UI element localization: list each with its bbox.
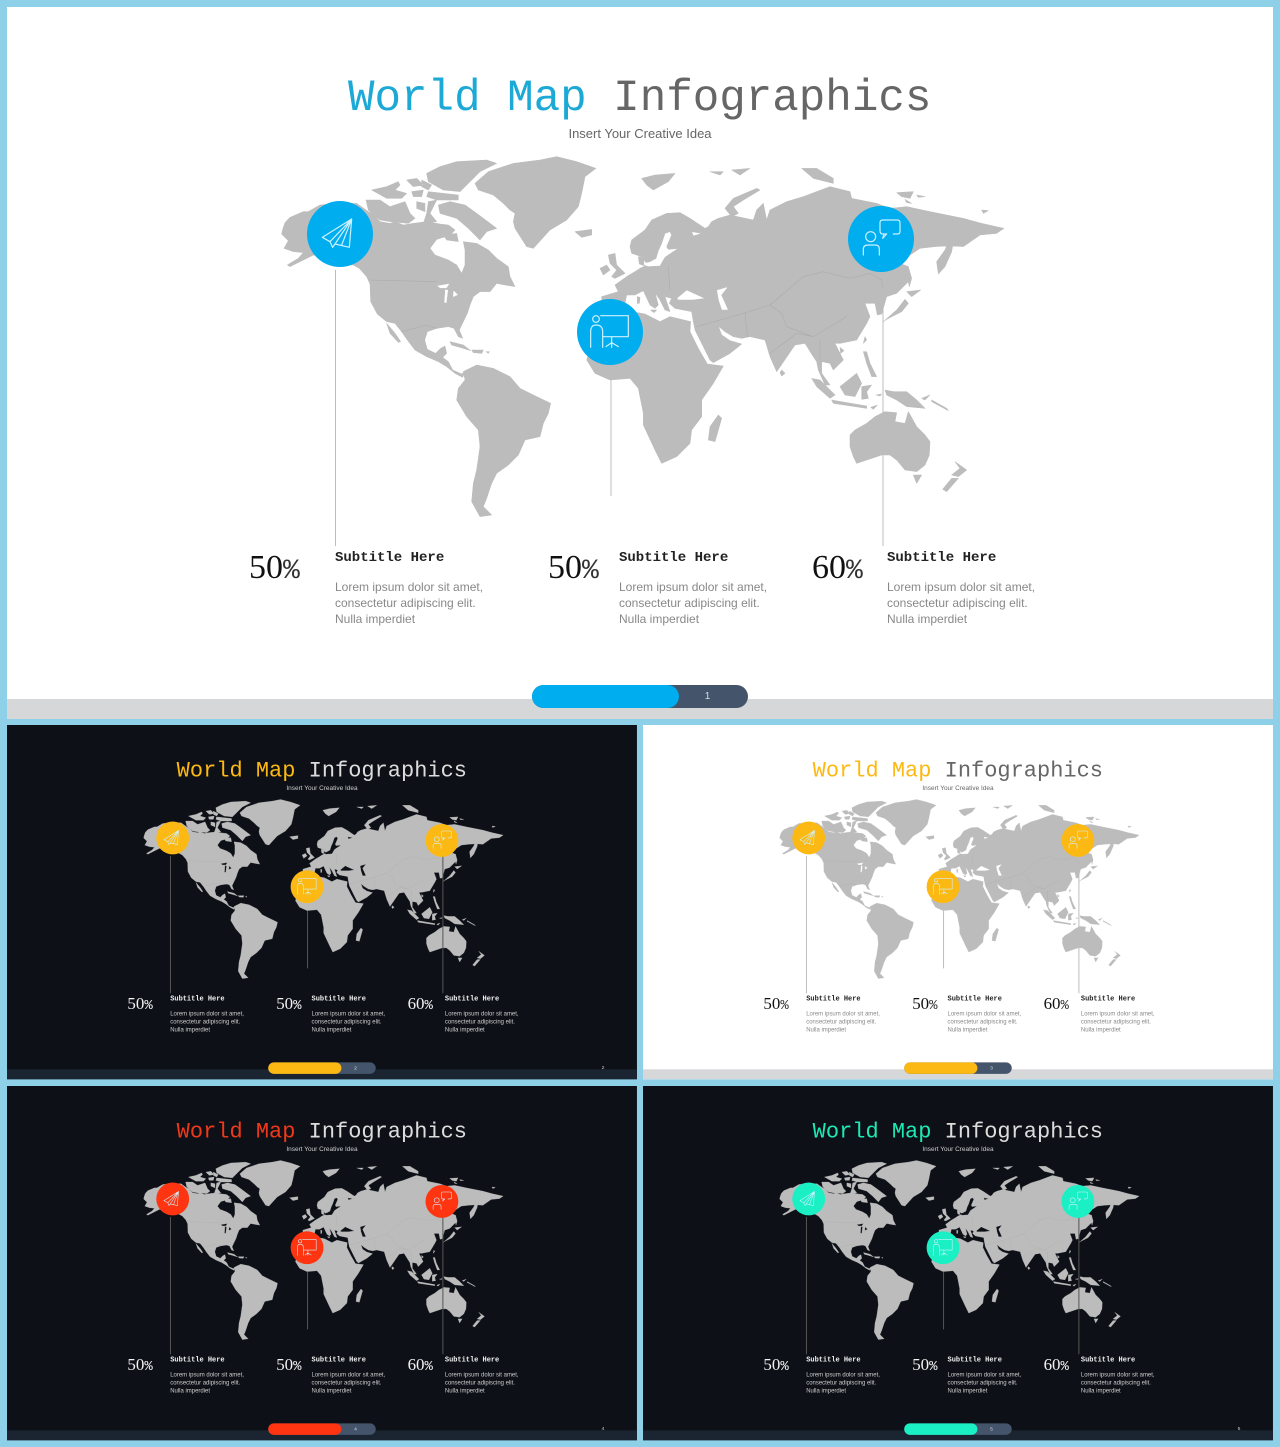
- panel: light yellow slide: [643, 725, 1273, 1079]
- stat 1: Subtitle Here: [806, 1356, 861, 1364]
- stat 1: [127, 1356, 244, 1394]
- stat 1: Lorem ipsum dolor sit amet,: [806, 1371, 880, 1378]
- stat 1: 50%: [763, 995, 789, 1014]
- subtitle: Insert Your Creative Idea: [286, 1145, 358, 1153]
- stat 3: consectetur adipiscing elit.: [1081, 1379, 1151, 1386]
- stat 1: consectetur adipiscing elit.: [335, 596, 476, 610]
- stat 3: [812, 549, 1035, 626]
- panel: dark teal slide: [643, 1086, 1273, 1440]
- stat 1: Lorem ipsum dolor sit amet,: [806, 1010, 880, 1017]
- footer bar: [643, 1430, 1273, 1440]
- stat 3: Lorem ipsum dolor sit amet,: [445, 1371, 519, 1378]
- subtitle: Insert Your Creative Idea: [922, 784, 994, 792]
- stat 3: [1044, 995, 1155, 1033]
- stat 1: 50%: [127, 1356, 153, 1375]
- title: World Map Infographics: [348, 74, 931, 124]
- stat 2: 50%: [912, 995, 937, 1014]
- stat 2: Subtitle Here: [948, 995, 1002, 1003]
- stat 1: consectetur adipiscing elit.: [170, 1018, 240, 1025]
- stat 3: Subtitle Here: [445, 995, 499, 1003]
- stat 1: 50%: [763, 1356, 789, 1375]
- stat 1: Subtitle Here: [170, 995, 225, 1003]
- progress pill: 2: [354, 1065, 357, 1071]
- world map with pins: [143, 799, 504, 994]
- stat 3: [1044, 1356, 1155, 1394]
- stat 2: Lorem ipsum dolor sit amet,: [312, 1371, 385, 1378]
- stat 3: Subtitle Here: [1081, 995, 1135, 1003]
- stat 1: 50%: [127, 995, 153, 1014]
- stat 1: 50%: [249, 549, 300, 587]
- title: World Map Infographics: [177, 1119, 467, 1144]
- stat 3: Nulla imperdiet: [445, 1387, 485, 1394]
- stat 3: Subtitle Here: [887, 550, 996, 566]
- stat 2: Nulla imperdiet: [312, 1026, 351, 1033]
- progress pill: 4: [354, 1426, 357, 1432]
- stat 1: Nulla imperdiet: [806, 1387, 846, 1394]
- stat 2: [548, 549, 767, 626]
- stat 3: consectetur adipiscing elit.: [445, 1379, 515, 1386]
- stat 2: Lorem ipsum dolor sit amet,: [619, 580, 767, 594]
- progress pill: [268, 1062, 376, 1074]
- stat 2: Nulla imperdiet: [948, 1387, 987, 1394]
- stat 1: Subtitle Here: [335, 550, 444, 566]
- stat 3: Nulla imperdiet: [887, 612, 967, 626]
- stat 3: consectetur adipiscing elit.: [1081, 1018, 1151, 1025]
- stat 1: Nulla imperdiet: [335, 612, 415, 626]
- stat 3: 60%: [1044, 1356, 1069, 1375]
- stat 2: consectetur adipiscing elit.: [948, 1379, 1018, 1386]
- stat 2: Subtitle Here: [948, 1356, 1002, 1364]
- stat 1: Lorem ipsum dolor sit amet,: [170, 1010, 244, 1017]
- stat 2: Lorem ipsum dolor sit amet,: [948, 1010, 1021, 1017]
- world map with pins: [780, 799, 1140, 994]
- title: World Map Infographics: [813, 1119, 1103, 1144]
- stat 3: Nulla imperdiet: [1081, 1026, 1121, 1033]
- stat 2: 50%: [548, 549, 599, 587]
- stat 1: Nulla imperdiet: [170, 1026, 210, 1033]
- subtitle: Insert Your Creative Idea: [922, 1145, 994, 1153]
- stat 3: Lorem ipsum dolor sit amet,: [1081, 1010, 1155, 1017]
- stat 2: 50%: [276, 995, 301, 1014]
- progress pill: 1: [705, 691, 710, 702]
- title: World Map Infographics: [177, 758, 467, 783]
- footer bar: [643, 1069, 1273, 1079]
- panel: dark yellow slide: [7, 725, 637, 1079]
- stat 2: consectetur adipiscing elit.: [312, 1379, 382, 1386]
- stat 2: Lorem ipsum dolor sit amet,: [948, 1371, 1021, 1378]
- stat 1: [763, 1356, 880, 1394]
- stat 1: Subtitle Here: [170, 1356, 225, 1364]
- stat 3: Lorem ipsum dolor sit amet,: [1081, 1371, 1155, 1378]
- stat 3: Lorem ipsum dolor sit amet,: [445, 1010, 519, 1017]
- page number: 5: [1238, 1426, 1240, 1431]
- progress pill: [268, 1423, 376, 1435]
- world map with pins: [282, 156, 1004, 546]
- panel: main blue slide: [7, 7, 1273, 719]
- stat 1: Subtitle Here: [806, 995, 861, 1003]
- stat 1: consectetur adipiscing elit.: [170, 1379, 240, 1386]
- stat 2: [276, 995, 385, 1033]
- page number: 4: [602, 1426, 604, 1431]
- progress pill: 3: [990, 1065, 993, 1071]
- stat 1: [127, 995, 244, 1033]
- stat 1: Lorem ipsum dolor sit amet,: [170, 1371, 244, 1378]
- stat 1: Lorem ipsum dolor sit amet,: [335, 580, 483, 594]
- stat 1: [249, 549, 483, 626]
- footer bar: [7, 699, 1273, 719]
- stat 3: 60%: [408, 995, 433, 1014]
- stat 1: consectetur adipiscing elit.: [806, 1379, 876, 1386]
- stat 3: 60%: [812, 549, 863, 587]
- world map with pins: [779, 1160, 1140, 1354]
- stat 2: [276, 1356, 385, 1394]
- stat 2: Lorem ipsum dolor sit amet,: [312, 1010, 385, 1017]
- stat 2: [912, 1356, 1021, 1394]
- stat 3: 60%: [408, 1356, 433, 1375]
- stat 2: 50%: [276, 1356, 301, 1375]
- stat 3: Subtitle Here: [445, 1356, 499, 1364]
- stat 2: Nulla imperdiet: [312, 1387, 351, 1394]
- stat 2: Subtitle Here: [312, 1356, 366, 1364]
- progress pill: 5: [990, 1426, 993, 1432]
- stat 3: Subtitle Here: [1081, 1356, 1135, 1364]
- world map with pins: [143, 1160, 504, 1354]
- stat 2: Subtitle Here: [619, 550, 728, 566]
- stat 3: 60%: [1044, 995, 1069, 1014]
- stat 2: consectetur adipiscing elit.: [619, 596, 760, 610]
- stat 3: Lorem ipsum dolor sit amet,: [887, 580, 1035, 594]
- stat 2: consectetur adipiscing elit.: [312, 1018, 382, 1025]
- page number: 2: [602, 1065, 604, 1070]
- footer bar: [7, 1430, 637, 1440]
- progress pill: [532, 685, 748, 708]
- stat 3: [408, 995, 519, 1033]
- stat 1: Nulla imperdiet: [170, 1387, 210, 1394]
- subtitle: Insert Your Creative Idea: [568, 126, 712, 141]
- title: World Map Infographics: [813, 758, 1103, 783]
- stat 3: [408, 1356, 519, 1394]
- stat 2: Subtitle Here: [312, 995, 366, 1003]
- stat 2: consectetur adipiscing elit.: [948, 1018, 1018, 1025]
- progress pill: [904, 1423, 1012, 1435]
- panel: dark red slide: [7, 1086, 637, 1440]
- stat 3: Nulla imperdiet: [1081, 1387, 1121, 1394]
- stat 1: Nulla imperdiet: [806, 1026, 846, 1033]
- stat 3: consectetur adipiscing elit.: [445, 1018, 515, 1025]
- stat 3: consectetur adipiscing elit.: [887, 596, 1028, 610]
- subtitle: Insert Your Creative Idea: [286, 784, 358, 792]
- stat 2: [912, 995, 1021, 1033]
- stat 3: Nulla imperdiet: [445, 1026, 485, 1033]
- stat 2: Nulla imperdiet: [619, 612, 699, 626]
- progress pill: [904, 1062, 1012, 1074]
- stat 2: 50%: [912, 1356, 937, 1375]
- stat 1: consectetur adipiscing elit.: [806, 1018, 876, 1025]
- stat 1: [763, 995, 880, 1033]
- footer bar: [7, 1069, 637, 1079]
- stat 2: Nulla imperdiet: [948, 1026, 987, 1033]
